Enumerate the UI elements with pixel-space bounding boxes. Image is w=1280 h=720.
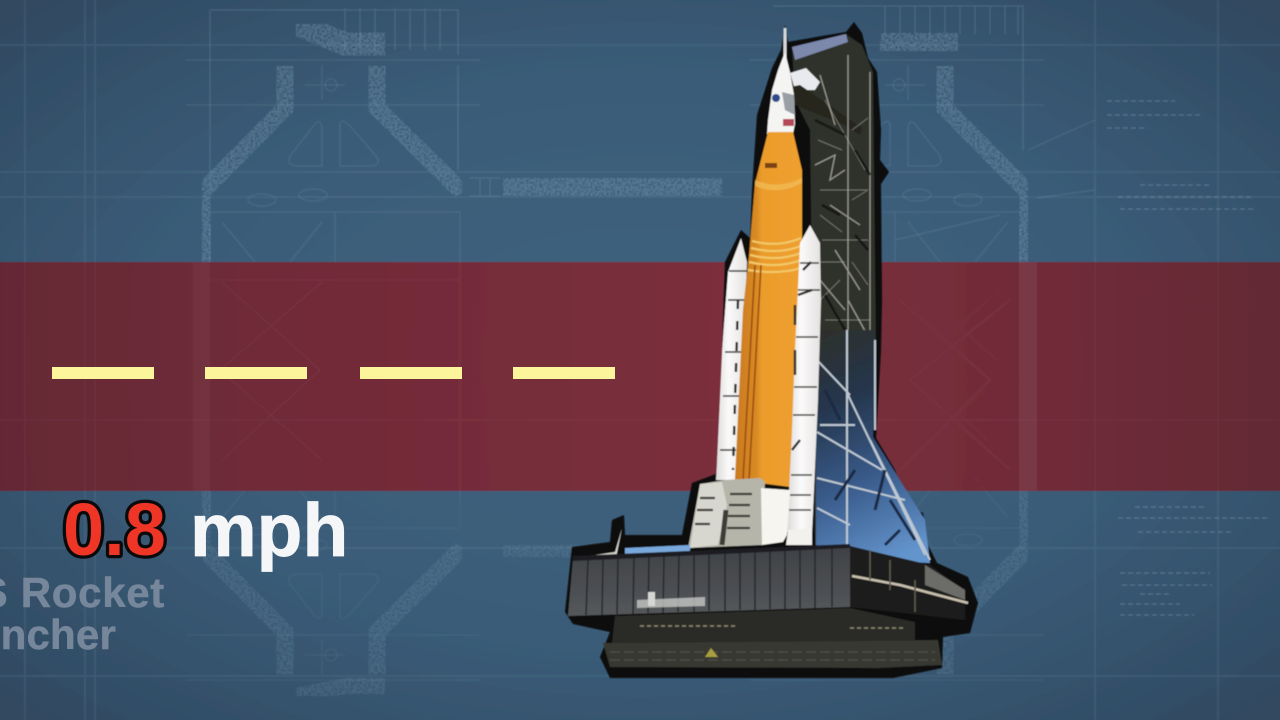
caption: SLS Rocket Launcher [0, 569, 165, 658]
launch abort tower [784, 28, 786, 58]
speed value: 0.8 [63, 488, 166, 571]
crawler underbody [603, 608, 942, 668]
red band [0, 262, 1280, 491]
core stage [735, 132, 802, 487]
deck railing [575, 528, 690, 562]
speed unit: mph [190, 488, 348, 572]
black cutout outline [565, 22, 978, 678]
launch tower upper [785, 34, 930, 563]
rocket on mobile launcher [565, 22, 978, 678]
launcher platform side [850, 546, 968, 620]
right booster [787, 225, 821, 535]
launch tower lower lattice [816, 330, 930, 563]
dashed speed line [52, 367, 615, 379]
speed readout [63, 488, 348, 572]
Orion capsule [767, 52, 795, 134]
left booster [716, 238, 748, 480]
booster hold-down base [688, 478, 812, 548]
launcher platform front face [568, 544, 851, 616]
